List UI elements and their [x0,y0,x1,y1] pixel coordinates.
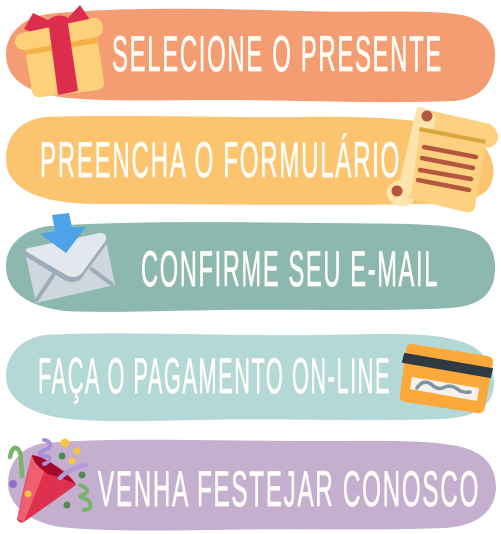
step 4 banner: online payment [6,333,494,421]
icon: envelope with arrow [25,213,115,303]
step 2 banner: fill in form [6,107,498,212]
icon: credit card [400,344,493,413]
banner shape: lilac [8,440,496,531]
banner shape: yellow [6,116,493,205]
banner shape: orange [6,9,495,102]
banner shape: teal [6,222,495,312]
icon: gift box [15,5,104,97]
step 3 banner: confirm e-mail [6,213,495,312]
icon: scroll form [387,107,498,212]
icon: party popper [9,438,91,523]
step 5 banner: celebrate [8,438,496,531]
banner shape: light teal [6,333,494,421]
step 1 banner: select gift [6,5,495,102]
